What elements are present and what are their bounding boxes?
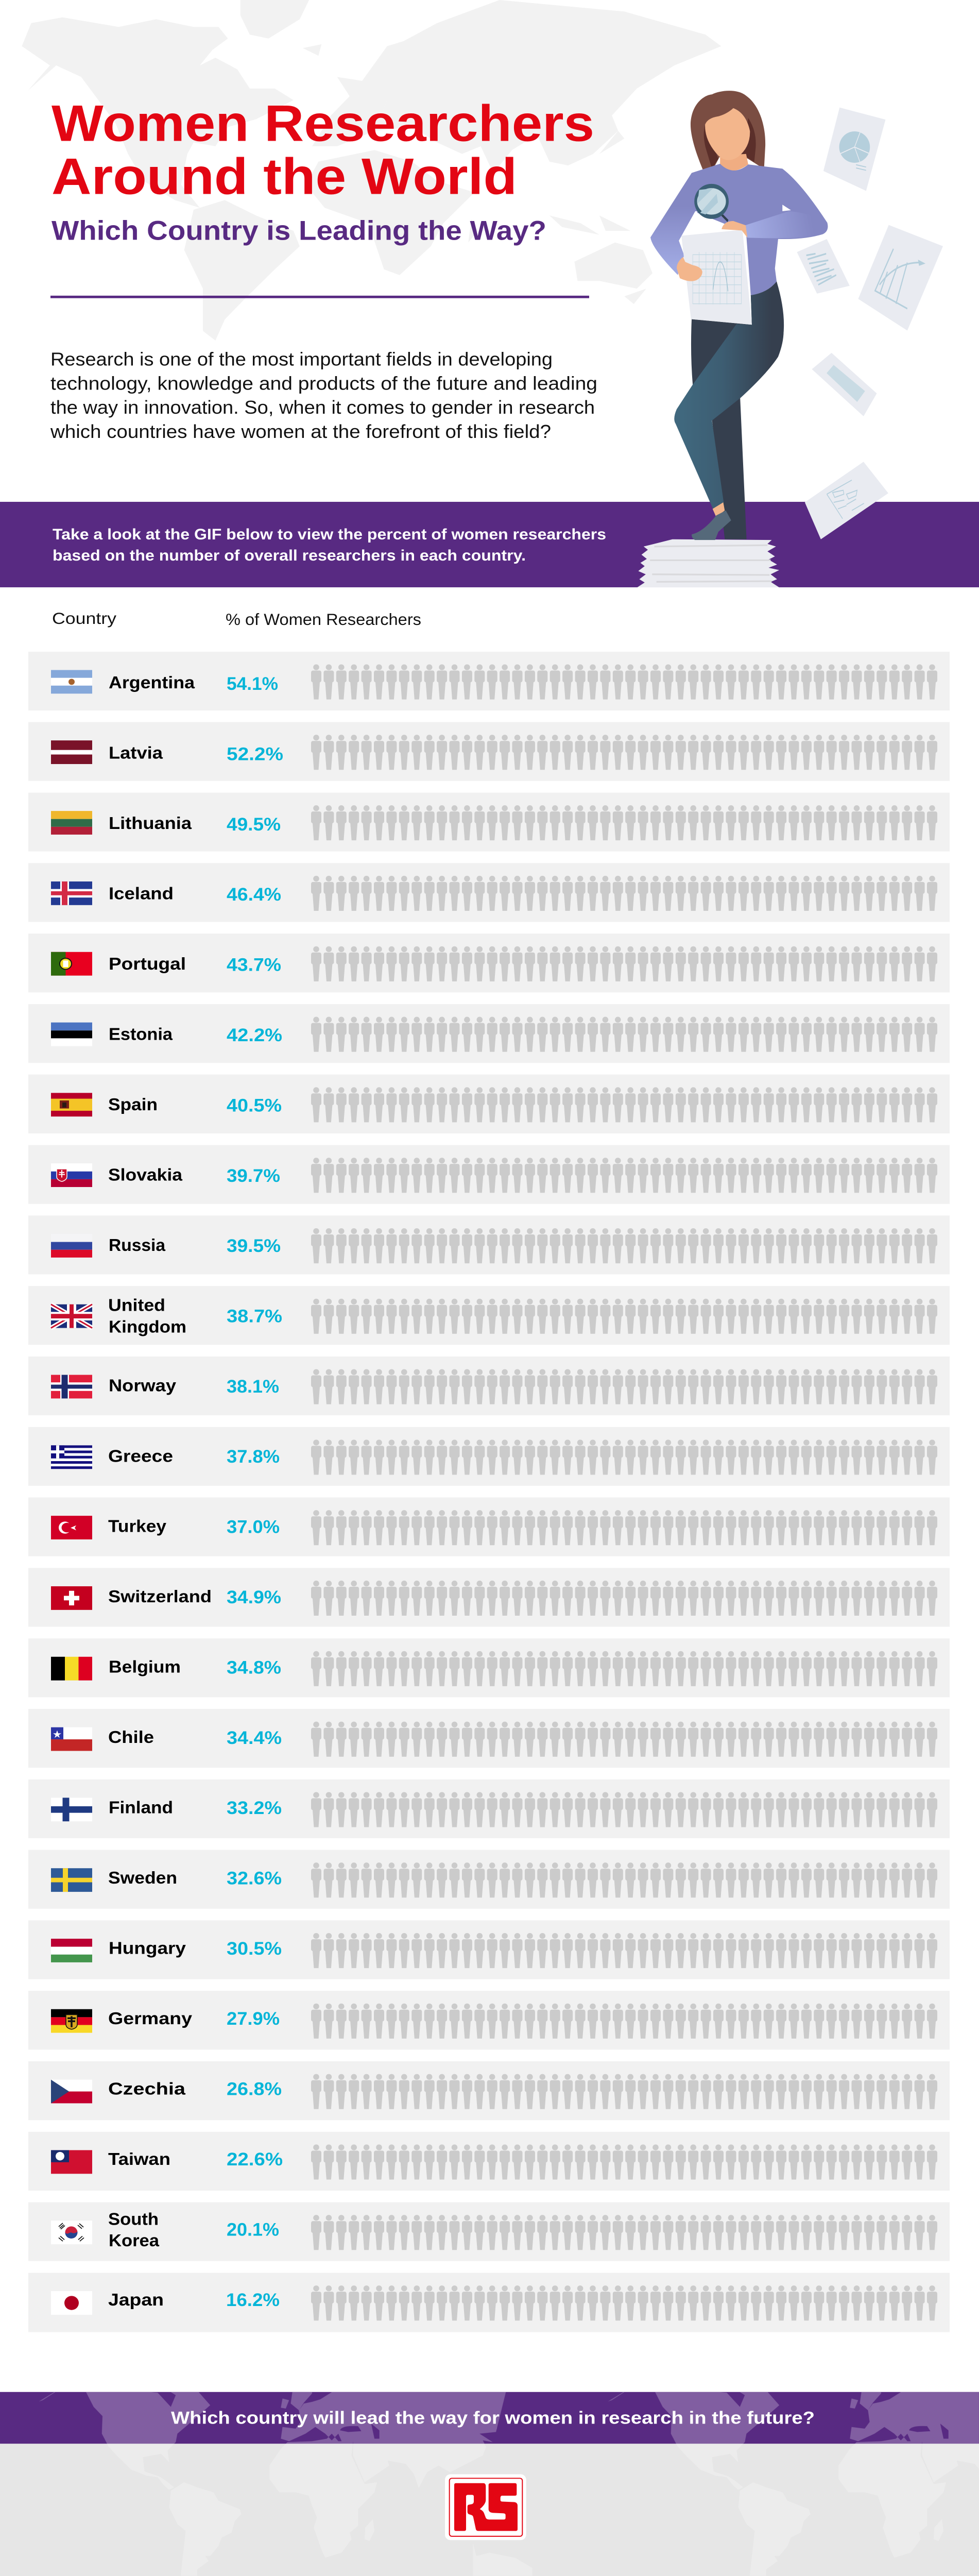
row: Belgium: 34.8% [227,1657,281,1677]
instruction text: Take a look at the GIF below to view the percent of women researchers [53,527,606,543]
footer purple band [0,2392,979,2444]
row: Hungary: Hungary [109,1939,186,1958]
row: Sweden [28,1850,950,1909]
row: Germany [28,1991,950,2049]
row: Czechia: Czechia [108,2080,185,2098]
row: Hungary: 30.5% [227,1938,282,1959]
row: Latvia: Latvia [109,744,163,762]
row: Sweden: 32.6% [227,1868,282,1888]
subtitle: Which Country is Leading the Way? [51,216,546,246]
row: United Kingdom [28,1286,950,1345]
row: Switzerland: Switzerland [108,1588,212,1606]
row: Turkey: 37.0% [227,1517,280,1537]
row: South Korea [28,2202,950,2261]
row: Estonia: Estonia [109,1025,173,1044]
row: Germany: 27.9% [227,2009,280,2029]
row: Argentina: 54.1% [227,673,278,694]
RS logo [445,2475,526,2540]
row: Germany: Germany [108,2009,192,2028]
intro paragraph: which countries have women at the forefront of this field? [50,421,551,442]
row: Czechia: 26.8% [227,2079,282,2099]
row: Greece: Greece [108,1447,173,1466]
floating paper: text lines [797,239,850,294]
title: Around the World [51,148,517,205]
title: Women Researchers [51,95,594,152]
intro paragraph: Research is one of the most important fields in developing [50,349,553,369]
table header: percent: % of Women Researchers [226,611,421,629]
stack of papers [637,539,779,587]
instruction text [53,527,606,564]
row: Estonia: 42.2% [227,1025,282,1045]
row: Portugal: 43.7% [227,955,281,975]
row: Chile: 34.4% [227,1727,282,1748]
row: Finland [28,1780,950,1838]
row: Taiwan: 22.6% [227,2149,283,2170]
row: Russia: Russia [109,1236,165,1255]
row: Russia: 39.5% [227,1236,281,1256]
row: Slovakia: 39.7% [227,1165,280,1186]
row: Turkey: Turkey [108,1517,166,1536]
row: South Korea: 20.1% [227,2219,279,2240]
row: Finland: 33.2% [227,1798,282,1818]
footer world map overlay [39,2392,979,2576]
row: Belgium: Belgium [109,1658,181,1677]
row: South Korea: South [108,2210,159,2229]
intro paragraph [50,349,597,442]
row: Japan: Japan [108,2291,164,2310]
row: Switzerland [28,1568,950,1627]
row: Norway: 38.1% [227,1376,279,1397]
row: Czechia [28,2061,950,2120]
row: Lithuania: 49.5% [227,814,281,835]
purple instruction band [0,502,979,587]
row: Greece: 37.8% [227,1447,280,1467]
row: Belgium [28,1638,950,1697]
row: Sweden: Sweden [108,1869,177,1888]
row: Turkey [28,1497,950,1556]
row: Chile: Chile [108,1728,154,1747]
row: Argentina: Argentina [109,673,195,692]
floating paper: flow diagram [805,462,888,539]
row: Iceland: Iceland [109,885,174,903]
row: Chile [28,1709,950,1768]
row: Switzerland: 34.9% [227,1587,281,1607]
woman figure [650,91,828,540]
row: Spain: 40.5% [227,1095,282,1115]
row: Portugal [28,934,950,992]
row: Lithuania [28,792,950,852]
row: Norway: Norway [109,1377,176,1396]
row: United Kingdom: Kingdom [109,1318,186,1336]
row: South Korea: Korea [109,2231,159,2250]
row: Taiwan: Taiwan [108,2150,170,2169]
row: Estonia [28,1004,950,1063]
footer grey panel [0,2444,979,2576]
row: Finland: Finland [109,1799,173,1817]
instruction text: based on the number of overall researchers in each country. [53,548,526,564]
row: Greece [28,1427,950,1486]
row: Norway [28,1357,950,1415]
row: Slovakia: Slovakia [108,1166,182,1184]
illustration: woman researcher with papers [637,91,943,587]
row: Hungary [28,1920,950,1979]
row: Japan [28,2273,950,2332]
row: Iceland: 46.4% [227,885,281,905]
row: Taiwan [28,2132,950,2191]
floating paper: grid [812,353,877,416]
row: Latvia [28,722,950,781]
row: Portugal: Portugal [109,955,186,974]
row: Japan: 16.2% [226,2290,280,2310]
row: Spain [28,1075,950,1133]
row: United Kingdom: United [108,1296,165,1315]
magnifying glass [696,186,728,221]
heading divider [50,296,589,298]
title [51,95,594,205]
row: Iceland [28,863,950,922]
floating paper: curve chart [858,225,943,331]
background world map [22,0,721,341]
floating paper: pie chart [823,108,885,191]
intro paragraph: the way in innovation. So, when it comes to gender in research [50,397,595,418]
row: Spain: Spain [108,1095,158,1114]
table header: country: Country [52,609,116,628]
row: Argentina [28,652,950,710]
row: Latvia: 52.2% [227,744,283,764]
row: Lithuania: Lithuania [109,814,192,833]
row: Slovakia [28,1145,950,1204]
row: United Kingdom: 38.7% [227,1306,282,1326]
row: Russia [28,1215,950,1275]
intro paragraph: technology, knowledge and products of the future and leading [50,373,597,394]
closing question: Which country will lead the way for women in research in the future? [171,2409,815,2428]
